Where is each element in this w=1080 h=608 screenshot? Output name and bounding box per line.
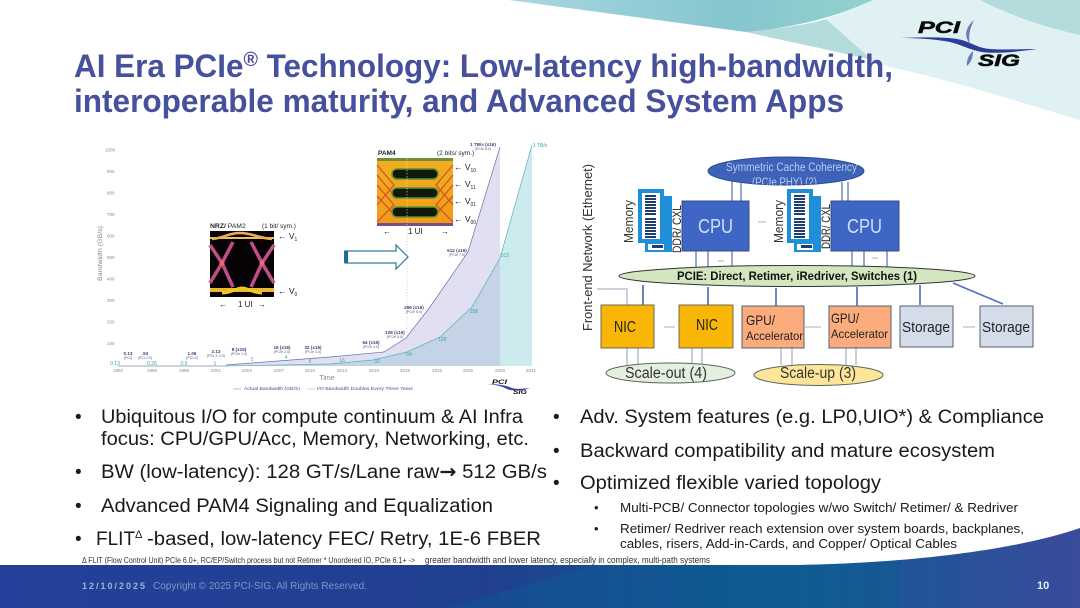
x axis labels: 2022 xyxy=(432,368,443,373)
data labels: actual bandwidth: (PCI 2.0) xyxy=(138,356,152,360)
data labels: actual bandwidth: (PCI-X) xyxy=(186,356,198,360)
connector lines xyxy=(597,181,1003,365)
cpu left: CPU xyxy=(698,215,733,238)
NRZ eye diagram: → xyxy=(258,300,266,309)
NRZ eye diagram: 1 xyxy=(295,237,298,243)
y axis labels: 600 xyxy=(107,234,115,238)
data labels: actual bandwidth: 64 (x16) xyxy=(362,340,380,345)
chart logo xyxy=(488,380,530,396)
x axis labels: 2031 xyxy=(526,368,537,373)
logo: PCI-SIG: PCI xyxy=(918,19,961,37)
data labels: actual bandwidth: 2.13 xyxy=(212,349,221,354)
data labels: actual bandwidth: 8 (x16) xyxy=(232,347,247,352)
PAM4 eye diagram: ← V xyxy=(454,179,471,189)
data labels: doubling trend: 512 xyxy=(501,253,509,259)
bullets: right column: Adv. System features (e.g. LP0,UIO*) & Compliance xyxy=(580,407,1044,428)
bullets: left column: BW (low-latency): 128 GT/s/Lane raw → 512 GB/s xyxy=(101,461,547,483)
bullets: left column: • xyxy=(75,407,82,428)
data labels: doubling trend: 64 xyxy=(406,352,412,358)
data labels: actual bandwidth: (PCIe 8.0) xyxy=(475,147,491,151)
y axis labels: 500 xyxy=(107,255,115,260)
x axis labels xyxy=(113,368,537,382)
PAM4 eye diagram xyxy=(377,150,476,236)
background: bottom footer band xyxy=(0,528,1080,608)
coherency ellipse: Symmetric Cache Coherency xyxy=(726,162,857,174)
data labels: doubling trend: 32 xyxy=(374,359,380,365)
NRZ eye diagram: ← xyxy=(219,300,227,309)
title: ® xyxy=(243,49,258,71)
NRZ eye diagram: 0 xyxy=(295,292,298,298)
data labels: actual bandwidth: .53 xyxy=(142,351,149,356)
x axis labels: 2028 xyxy=(495,368,506,373)
data labels: actual bandwidth: (PCIe 1.0) xyxy=(231,352,247,356)
PAM4 eye diagram: ← xyxy=(383,227,391,236)
data labels: actual bandwidth xyxy=(124,142,496,360)
bullets: left column xyxy=(75,407,547,550)
y axis labels: 200 xyxy=(107,320,115,324)
PAM4 eye diagram: 00 xyxy=(471,220,476,226)
legend: I/O Bandwidth Doubles Every Three Years xyxy=(317,386,414,391)
logo: PCI-SIG: SIG xyxy=(978,52,1020,70)
data labels: doubling trend: 2 xyxy=(251,357,254,363)
PAM4 eye diagram: PAM4 xyxy=(378,150,396,157)
x axis labels: 2001 xyxy=(211,368,222,373)
bullets: right column: Retimer/ Redriver reach extension over system boards, backplanes, xyxy=(620,521,1024,536)
NIC boxes: NIC xyxy=(696,317,718,334)
arrow: NRZ to PAM4 xyxy=(344,245,408,269)
data labels: doubling trend xyxy=(110,143,548,367)
coherency ellipse: (PCIe PHY) (2) xyxy=(752,177,817,189)
network label: Front-end Network (Ethernet) xyxy=(580,164,595,331)
NRZ eye diagram: 1 UI xyxy=(238,300,253,309)
chart: bandwidth over time xyxy=(97,142,548,396)
NRZ eye diagram: (1 bit/ sym.) xyxy=(262,223,296,230)
y axis labels: 100 xyxy=(107,341,115,346)
data labels: doubling trend: 0.13 xyxy=(110,361,120,367)
diagram: system topology xyxy=(580,157,1033,386)
data labels: actual bandwidth: (PCIe 5.0) xyxy=(387,335,403,339)
data labels: actual bandwidth: 256 (x16) xyxy=(404,305,424,310)
bullets: right column: • xyxy=(594,521,599,536)
y axis labels xyxy=(97,148,116,346)
title: AI Era PCIe xyxy=(74,48,247,84)
x axis labels: 1995 xyxy=(147,368,158,373)
y axis labels: 400 xyxy=(107,276,115,282)
x axis labels: 2013 xyxy=(337,368,348,373)
scale-up ellipse: Scale-up (3) xyxy=(780,365,856,382)
bullets: right column: Multi-PCB/ Connector topologies w/wo Switch/ Retimer/ & Redriver xyxy=(620,500,1019,515)
bullets: right column: • xyxy=(553,407,560,428)
Storage boxes xyxy=(900,306,1033,347)
bullets: right column: Optimized flexible varied topology xyxy=(580,473,882,494)
footer: page number: 10 xyxy=(1037,580,1049,592)
data labels: actual bandwidth: 16 (x16) xyxy=(273,345,291,350)
bullets: left column: Advanced PAM4 Signaling and Equalization xyxy=(101,496,493,517)
bullets: right column: • xyxy=(553,473,560,494)
NRZ eye diagram: ← V xyxy=(278,231,295,241)
memory left: Memory xyxy=(622,199,636,243)
data labels: actual bandwidth: 128 (x16) xyxy=(385,330,405,335)
PCIe ellipse: PCIE: Direct, Retimer, iRedriver, Switches (1) xyxy=(677,269,917,283)
title: interoperable maturity, and Advanced System Apps xyxy=(74,83,844,119)
footnote xyxy=(82,555,710,565)
background: top teal swoosh shapes xyxy=(509,0,1080,120)
data labels: doubling trend: 1 TB/s xyxy=(533,143,548,149)
bullets: left column: Ubiquitous I/O for compute continuum & AI Infra xyxy=(101,407,523,428)
NRZ eye diagram: NRZ/ PAM2 xyxy=(210,223,246,230)
PAM4 eye diagram: 1 UI xyxy=(408,227,423,236)
data labels: actual bandwidth: (PCIe 2.0) xyxy=(274,350,290,354)
chart logo: SIG xyxy=(513,390,527,396)
bullets: left column: focus: CPU/GPU/Acc, Memory, Networking, etc. xyxy=(101,429,529,450)
scale-up ellipse xyxy=(754,364,883,386)
x axis labels: 2010 xyxy=(305,368,316,373)
bullets: left column: • xyxy=(75,529,82,550)
memory left xyxy=(622,189,684,253)
data labels: doubling trend: 256 xyxy=(470,309,478,315)
data labels: doubling trend: 0.26 xyxy=(147,361,157,367)
x axis labels: 1992 xyxy=(113,368,124,373)
data labels: doubling trend: 4 xyxy=(285,355,288,361)
Storage boxes: Storage xyxy=(982,319,1030,336)
cpu right xyxy=(831,201,899,251)
footer: date and copyright: Copyright © 2025 PCI-SIG. All Rights Reserved. xyxy=(153,581,367,592)
footer: date and copyright: 12/10/2025 xyxy=(82,581,145,591)
data labels: doubling trend: 1 xyxy=(214,361,217,367)
data labels: doubling trend: 128 xyxy=(438,337,446,343)
GPU boxes: Accelerator xyxy=(831,327,888,341)
Storage boxes: Storage xyxy=(902,319,950,336)
legend xyxy=(233,386,414,391)
bullets: left column: FLIT xyxy=(96,529,135,550)
x axis labels: 2025 xyxy=(463,368,474,373)
NIC boxes xyxy=(601,305,733,348)
data labels: doubling trend: 0.5 xyxy=(181,361,188,367)
y axis labels: Bandwidth (GB/s) xyxy=(97,226,104,281)
bullets: right column: Backward compatibility and mature ecosystem xyxy=(580,441,995,462)
GPU boxes: Accelerator xyxy=(746,329,803,343)
x axis labels: Time xyxy=(319,375,335,382)
data labels: actual bandwidth: 32 (x16) xyxy=(304,345,322,350)
bullets: right column: • xyxy=(553,441,560,462)
footnote: Δ FLIT (Flow Control Unit) PCIe 6.0+, RC/EP/Switch process but not Retimer * Unordered IO, PCIe 6.1+ -> xyxy=(82,556,415,565)
y axis labels: 900 xyxy=(107,169,115,174)
legend: Actual Bandwidth (GB/S) xyxy=(244,386,301,391)
cpu left xyxy=(682,201,749,251)
bullets: left column: Δ xyxy=(135,529,143,541)
x axis labels: 2016 xyxy=(369,368,380,373)
memory left: DDR/ CXL xyxy=(670,205,684,253)
GPU boxes: GPU/ xyxy=(746,312,775,328)
title: Technology: Low-latency high-bandwidth, xyxy=(258,48,893,84)
cpu right: CPU xyxy=(847,215,882,238)
footnote: greater bandwidth and lower latency, especially in complex, multi-path systems xyxy=(425,555,710,565)
data labels: doubling trend: 8 xyxy=(309,359,312,365)
data labels: actual bandwidth: (PCI-X 2.0) xyxy=(207,354,225,358)
scale-out ellipse xyxy=(606,363,735,383)
y axis labels: 1000 xyxy=(105,148,116,152)
NIC boxes: NIC xyxy=(614,319,636,336)
data labels: actual bandwidth: 512 (x16) xyxy=(447,248,467,253)
bullets: left column: -based, low-latency FEC/ Retry, 1E-6 FBER xyxy=(147,529,541,550)
PAM4 eye diagram: ← V xyxy=(454,196,471,206)
PAM4 eye diagram: 01 xyxy=(471,202,476,208)
NRZ eye diagram: ← V xyxy=(278,286,295,296)
data labels: actual bandwidth: 1 TB/s (x16) xyxy=(470,142,496,147)
data labels: actual bandwidth: (PCIe 3.0) xyxy=(305,350,321,354)
GPU boxes: GPU/ xyxy=(831,310,859,326)
memory right: Memory xyxy=(772,199,786,243)
PAM4 eye diagram: 11 xyxy=(471,185,476,191)
bullets: right column xyxy=(553,407,1044,551)
PAM4 eye diagram: ← V xyxy=(454,214,471,224)
bullets: right column: • xyxy=(594,500,599,515)
bullets: left column: • xyxy=(75,462,82,483)
PAM4 eye diagram: 10 xyxy=(471,168,476,174)
memory right xyxy=(772,189,833,252)
bullets: left column: • xyxy=(75,496,82,517)
title xyxy=(74,48,893,119)
y axis labels: 800 xyxy=(107,190,115,196)
GPU boxes xyxy=(742,306,891,348)
PAM4 eye diagram: ← V xyxy=(454,162,471,172)
PAM4 eye diagram: (2 bits/ sym.) xyxy=(437,150,474,157)
data labels: actual bandwidth: (PCI) xyxy=(124,356,132,360)
data labels: actual bandwidth: (PCIe 7.0) xyxy=(449,253,465,257)
x axis labels: 2004 xyxy=(242,368,253,373)
x axis labels: 2007 xyxy=(274,368,285,373)
x axis labels: 1998 xyxy=(179,368,190,373)
PAM4 eye diagram: → xyxy=(441,227,449,236)
data labels: actual bandwidth: 1.06 xyxy=(188,351,197,356)
y axis labels: 700 xyxy=(107,212,115,217)
bullets: right column: cables, risers, Add-in-Cards, and Copper/ Optical Cables xyxy=(620,536,958,551)
scale-out ellipse: Scale-out (4) xyxy=(625,365,707,382)
coherency ellipse xyxy=(708,157,864,189)
curve areas xyxy=(118,145,532,366)
memory right: DDR/ CXL xyxy=(819,204,833,249)
x axis labels: 2019 xyxy=(400,368,411,373)
data labels: actual bandwidth: 0.13 xyxy=(124,351,133,356)
PCIe ellipse xyxy=(619,266,975,286)
data labels: actual bandwidth: (PCIe 6.0) xyxy=(406,310,422,314)
logo: PCI-SIG xyxy=(900,19,1037,70)
data labels: doubling trend: 16 xyxy=(339,358,345,364)
data labels: actual bandwidth: (PCIe 4.0) xyxy=(363,345,379,349)
NRZ eye diagram xyxy=(210,223,298,309)
chart logo: PCI xyxy=(492,380,507,386)
y axis labels: 300 xyxy=(107,298,115,303)
